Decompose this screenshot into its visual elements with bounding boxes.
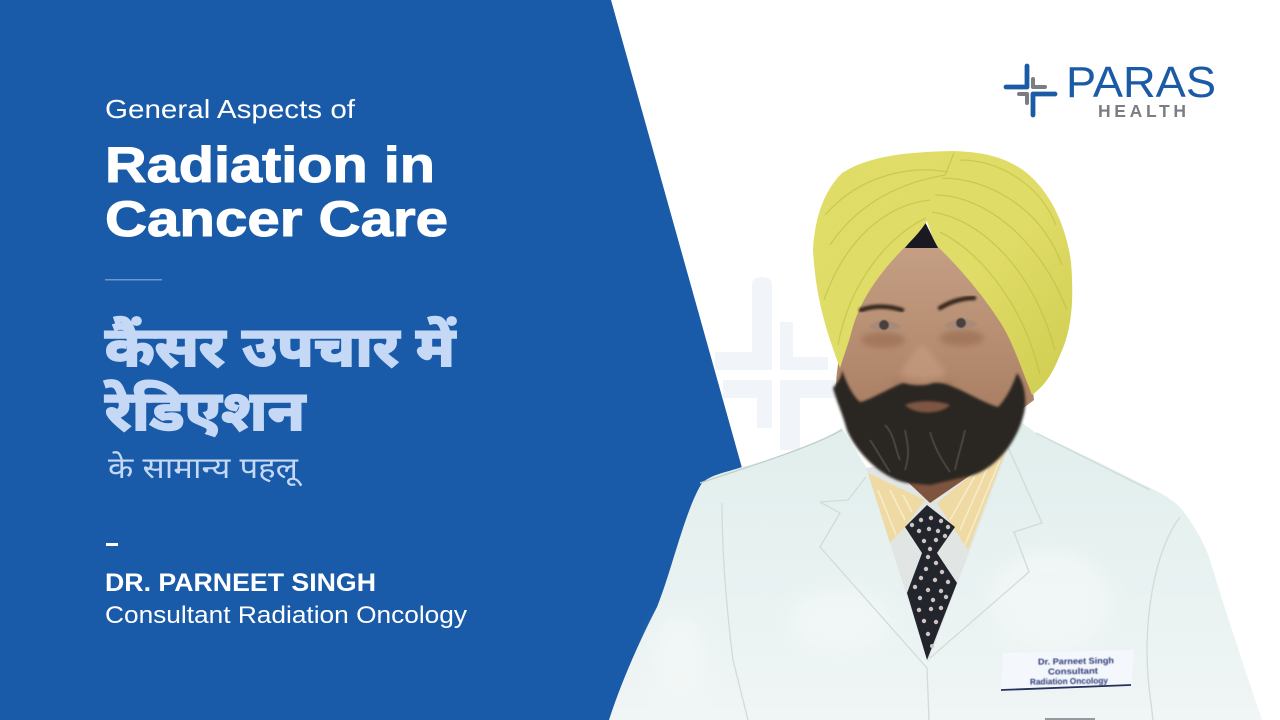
nose <box>900 345 946 380</box>
figure: doctor <box>609 151 1262 720</box>
neck <box>895 470 978 503</box>
tie <box>905 505 957 660</box>
beard <box>833 370 1025 485</box>
logo: Paras Health <box>1006 58 1216 121</box>
black under-turban patch <box>905 222 938 248</box>
heading: Hindi line 1: कैंसर उपचार में <box>105 316 456 378</box>
eyebrows <box>861 298 974 310</box>
text block: doctor credit <box>105 569 467 629</box>
heading: Hindi line 2: रेडिएशन <box>104 380 306 442</box>
shirt collar: right <box>937 445 1008 550</box>
collar check pattern <box>878 460 1000 545</box>
watermark: pale cross logo <box>715 277 835 450</box>
heading: Cancer Care: Cancer Care <box>105 191 448 247</box>
badge department: Radiation Oncology <box>1030 675 1108 687</box>
undershirt <box>866 443 1010 662</box>
badge role: Consultant <box>1048 666 1098 676</box>
pocket item <box>1045 718 1095 720</box>
divider line <box>105 279 162 280</box>
wordmark: PARAS: PARAS <box>1066 58 1216 107</box>
subtitle: Hindi: के सामान्य पहलू <box>108 450 302 487</box>
beard grey streaks <box>870 425 965 472</box>
dash accent <box>106 543 118 546</box>
coat soft highlights <box>655 550 1110 705</box>
eyes <box>868 318 978 331</box>
text block: English title <box>105 94 448 247</box>
heading: Radiation in: Radiation in <box>105 137 435 193</box>
shirt collar: left <box>868 473 925 543</box>
tie dots <box>910 516 950 648</box>
coat <box>609 420 1262 720</box>
face shading <box>861 330 984 395</box>
doctor name: DR. PARNEET SINGH <box>105 569 376 597</box>
name badge <box>1001 650 1134 690</box>
coat seams <box>700 430 1180 720</box>
doctor title: Consultant Radiation Oncology <box>105 602 467 629</box>
background panel: blue diagonal <box>0 0 742 720</box>
face <box>836 240 1034 480</box>
text block: Hindi title <box>104 316 456 487</box>
icon: cross <box>1006 66 1055 115</box>
wordmark: HEALTH: HEALTH <box>1098 101 1186 121</box>
subtitle: General Aspects of: General Aspects of <box>105 94 356 124</box>
lips <box>905 401 950 412</box>
turban <box>813 151 1072 395</box>
badge name: Dr. Parneet Singh <box>1038 655 1114 667</box>
turban folds <box>824 153 1067 375</box>
